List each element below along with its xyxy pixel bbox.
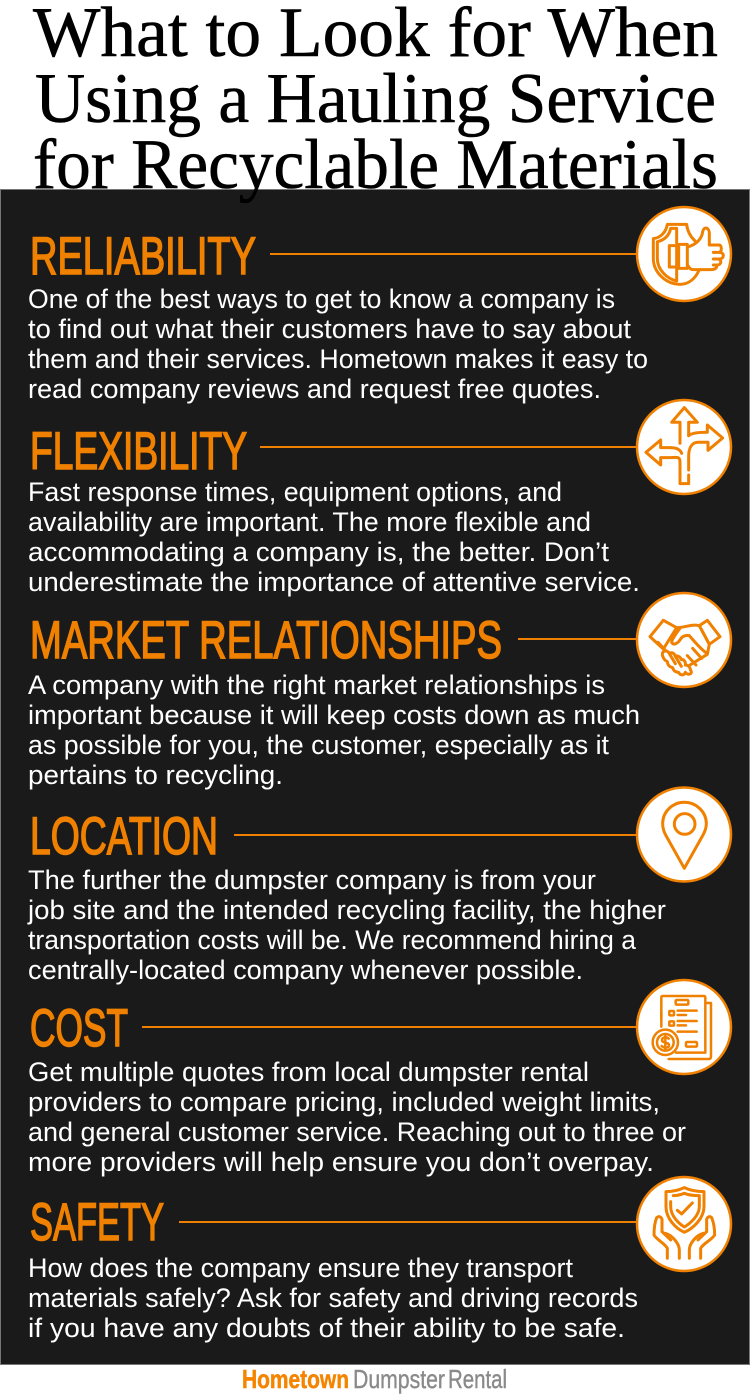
- heading: safety: SAFETY: [30, 1193, 164, 1252]
- text: safety: [28, 1253, 638, 1343]
- logo: Hometown Dumpster Rental: Hometown: [242, 1364, 349, 1394]
- icon: hands holding shield: [637, 1177, 731, 1271]
- logo: Hometown Dumpster Rental: Rental: [448, 1364, 507, 1394]
- text: flexibility: [28, 477, 640, 597]
- section: cost: [28, 980, 731, 1177]
- text: market relationships: [28, 670, 640, 790]
- logo: Hometown Dumpster Rental: Dumpster: [353, 1364, 445, 1394]
- text: flexibility: availability are important. The more flexible and: [28, 507, 591, 537]
- text: flexibility: underestimate the importance of attentive service.: [28, 567, 640, 597]
- text: reliability: to find out what their customers have to say about: [28, 314, 631, 344]
- text: reliability: them and their services. Hometown makes it easy to: [28, 344, 648, 374]
- text: market relationships: A company with the right market relationships is: [28, 670, 605, 700]
- heading: cost: COST: [30, 999, 128, 1058]
- heading: flexibility: FLEXIBILITY: [30, 422, 247, 481]
- text: reliability: [28, 284, 648, 404]
- text: location: job site and the intended recycling facility, the higher: [27, 895, 666, 925]
- heading: location: LOCATION: [30, 807, 218, 866]
- text: safety: materials safely? Ask for safety and driving records: [28, 1283, 638, 1313]
- text: cost: Get multiple quotes from local dumpster rental: [28, 1057, 589, 1087]
- text: market relationships: important because it will keep costs down as much: [28, 700, 640, 730]
- text: reliability: read company reviews and request free quotes.: [28, 374, 601, 404]
- text: cost: more providers will help ensure you don’t overpay.: [28, 1147, 654, 1177]
- text: cost: and general customer service. Reaching out to three or: [28, 1117, 686, 1147]
- section: location: [27, 788, 731, 985]
- title: Using a Hauling Service: [35, 60, 716, 138]
- text: cost: [28, 1057, 686, 1177]
- text: flexibility: accommodating a company is, the better. Don’t: [28, 537, 610, 567]
- text: flexibility: Fast response times, equipment options, and: [28, 477, 562, 507]
- text: market relationships: as possible for you, the customer, especially as it: [28, 730, 609, 760]
- icon: invoice with dollar coin: [637, 980, 731, 1074]
- text: safety: How does the company ensure they transport: [28, 1253, 573, 1283]
- text: safety: if you have any doubts of their ability to be safe.: [28, 1313, 625, 1343]
- icon: handshake: [637, 593, 731, 687]
- title: for Recyclable Materials: [33, 126, 718, 204]
- section: reliability: [28, 207, 731, 404]
- title: [33, 0, 718, 204]
- text: location: centrally-located company whenever possible.: [28, 955, 583, 985]
- section: flexibility: [28, 400, 731, 597]
- text: location: transportation costs will be. We recommend hiring a: [28, 925, 637, 955]
- text: cost: providers to compare pricing, included weight limits,: [28, 1087, 660, 1117]
- text: market relationships: pertains to recycling.: [28, 760, 283, 790]
- text: location: The further the dumpster company is from your: [28, 865, 596, 895]
- text: reliability: One of the best ways to get to know a company is: [28, 284, 615, 314]
- heading: market relationships: MARKET RELATIONSHIPS: [30, 611, 502, 670]
- section: market relationships: [28, 593, 731, 790]
- icon: shield and thumbs up: [637, 207, 731, 301]
- icon: branching arrows: [637, 400, 731, 494]
- text: location: [27, 865, 666, 985]
- icon: map pin: [637, 788, 731, 882]
- logo: Hometown Dumpster Rental: [242, 1364, 507, 1394]
- section: safety: [28, 1177, 731, 1343]
- heading: reliability: RELIABILITY: [30, 227, 256, 286]
